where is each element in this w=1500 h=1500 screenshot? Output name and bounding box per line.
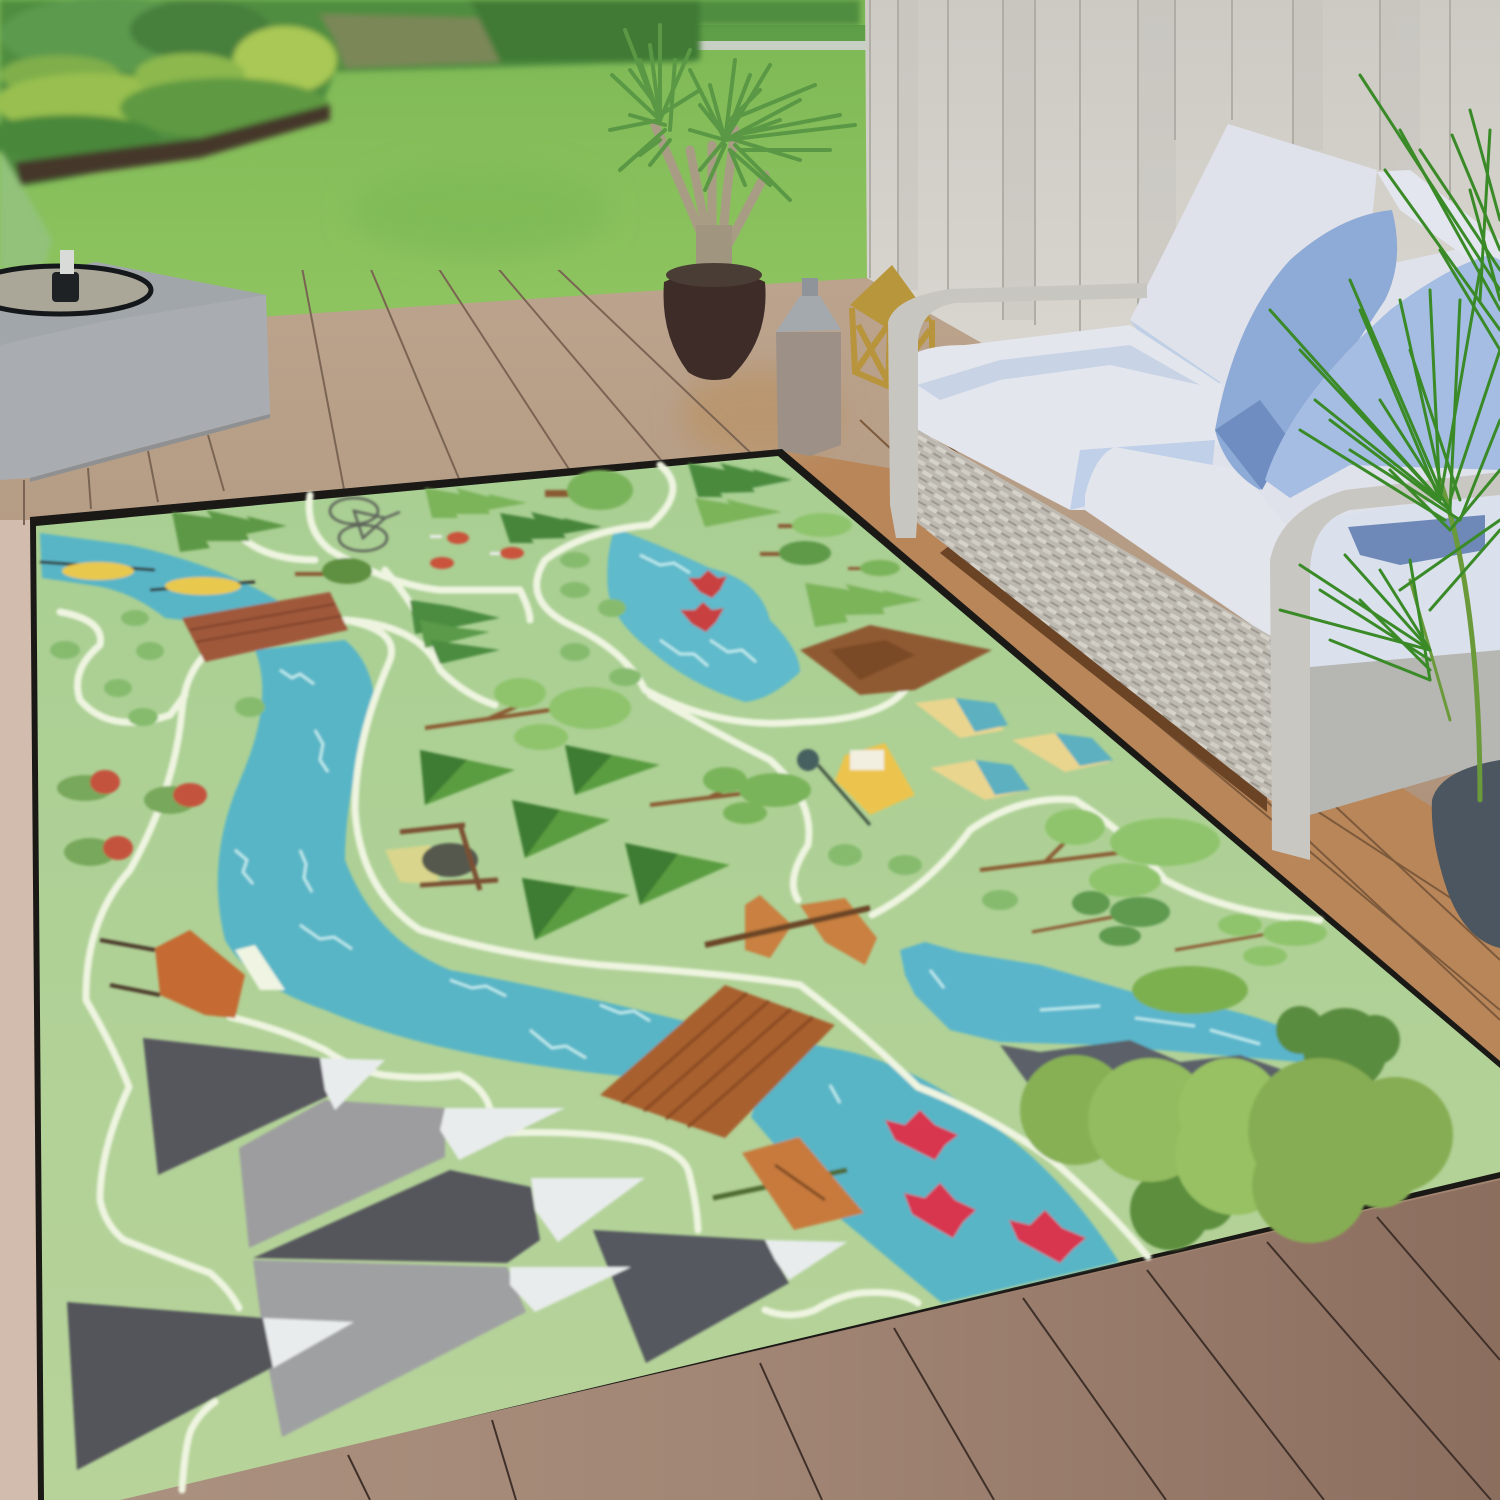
top bridge bbox=[182, 592, 348, 662]
right arm bbox=[1270, 472, 1500, 860]
water ripples bbox=[235, 555, 1260, 1103]
top lake bbox=[607, 528, 800, 702]
grey cube side table with tray bbox=[0, 250, 270, 482]
kayaks bbox=[40, 562, 255, 595]
white trails bbox=[60, 465, 1320, 1490]
garden lawn bbox=[0, 0, 880, 330]
rear seat cushion bbox=[898, 325, 1222, 510]
blue pillow left bbox=[1215, 210, 1397, 490]
round trees bbox=[295, 470, 900, 584]
large tree grove bbox=[1020, 966, 1453, 1250]
brown animal lodge bbox=[100, 930, 285, 1018]
front seat cushion bbox=[1085, 447, 1290, 645]
rug border bbox=[30, 449, 1500, 1500]
palm fronds bbox=[610, 25, 855, 200]
far seat area bbox=[1310, 490, 1500, 668]
red birds on the river bbox=[885, 1110, 1086, 1263]
right potted palm bbox=[1270, 75, 1500, 948]
wicker sofa bbox=[888, 124, 1500, 860]
blue pillow right bbox=[1265, 255, 1500, 498]
small leaf shrubs bbox=[50, 552, 1018, 910]
branching trees bbox=[425, 678, 1327, 966]
birds on the lake bbox=[680, 570, 727, 632]
gold lantern bbox=[850, 265, 932, 386]
candle bbox=[52, 250, 79, 302]
triangular pine forest bbox=[420, 745, 730, 940]
large bridge bbox=[600, 985, 835, 1138]
parked campers bbox=[915, 698, 1113, 800]
plant pot bbox=[664, 270, 766, 380]
crossroads signpost bbox=[705, 895, 877, 965]
waterfall mountain bbox=[1000, 1040, 1312, 1110]
sofa shadow bbox=[940, 545, 1267, 812]
dark pot bbox=[1432, 760, 1500, 948]
upper left river bbox=[40, 533, 280, 622]
tray bbox=[0, 266, 151, 314]
back cushions bbox=[1130, 124, 1377, 382]
cabin bbox=[800, 625, 992, 695]
sofa interior backing bbox=[1070, 240, 1500, 660]
palm stems and leaves bbox=[1270, 75, 1500, 800]
wooden trail sign bbox=[713, 1137, 864, 1230]
berry bushes bbox=[57, 770, 207, 866]
fir trees bbox=[172, 463, 922, 664]
bicycle bbox=[330, 498, 400, 551]
waterfall lake bbox=[900, 942, 1355, 1075]
silver lantern bbox=[776, 278, 841, 456]
potted plant bbox=[610, 25, 855, 380]
wicker front bbox=[898, 418, 1281, 805]
cooking pot over campfire bbox=[385, 825, 498, 890]
yellow caravan bbox=[797, 743, 915, 825]
main river bbox=[218, 640, 1119, 1303]
wicker side bbox=[1310, 650, 1500, 815]
mountains bbox=[67, 1038, 847, 1470]
rug field bbox=[36, 456, 1500, 1500]
left arm bbox=[888, 283, 1147, 538]
play rug bbox=[30, 449, 1500, 1500]
mushrooms bbox=[430, 532, 524, 569]
garden hedges bbox=[0, 0, 860, 270]
wall with vertical planks bbox=[865, 0, 1500, 420]
